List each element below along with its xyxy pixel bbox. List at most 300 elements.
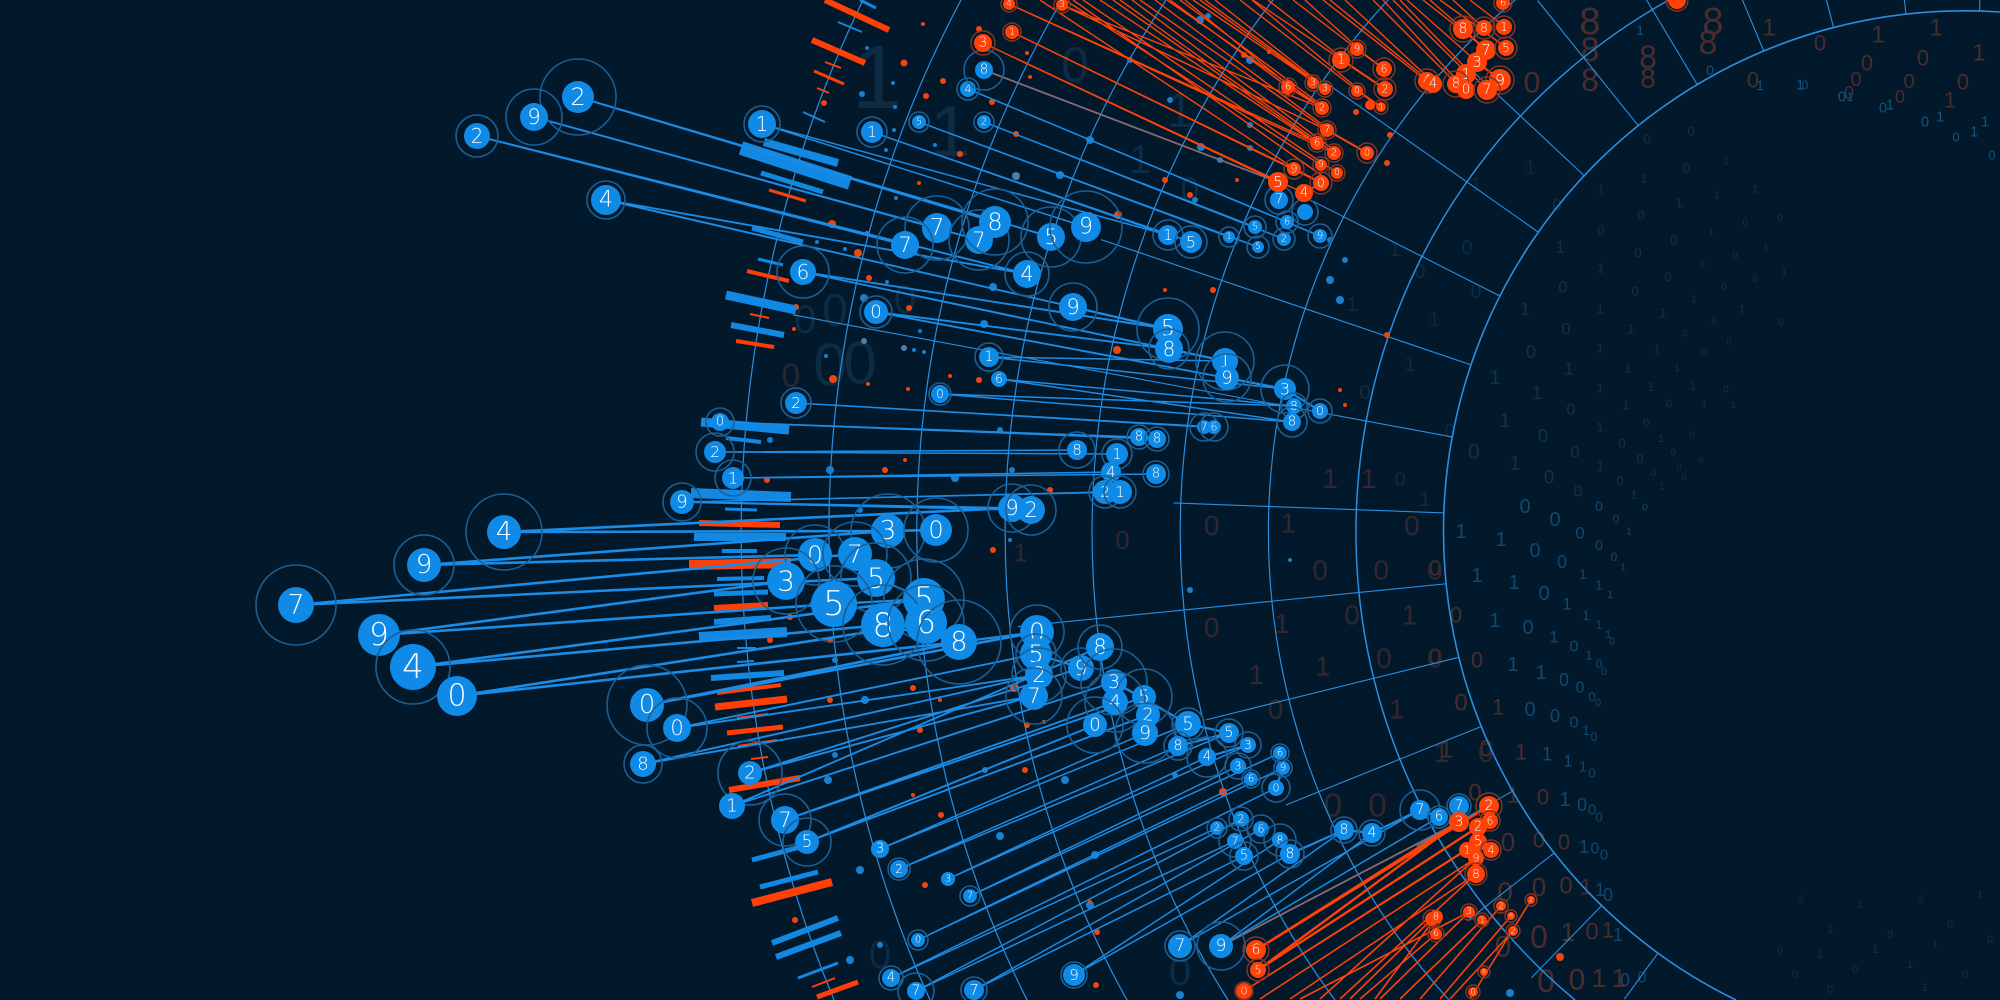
node cluster: upper blue: 5 xyxy=(1255,242,1261,252)
node cluster: lower orange xyxy=(1235,793,1537,1000)
blue digits upper right cluster: 0 xyxy=(1838,88,1846,106)
node cluster: upper orange: 3 xyxy=(1059,0,1065,10)
dark ghost digits behind left rings: 1 xyxy=(852,28,902,128)
node cluster: large left outliers: 4 xyxy=(496,517,512,547)
node cluster: lower orange: 2 xyxy=(1474,820,1482,834)
faint binary digits inside inner circle, upper: 0 xyxy=(1670,448,1676,458)
brown binary digits in outer rings: 1 xyxy=(1871,22,1885,48)
faint binary digits inside inner circle, upper: 0 xyxy=(1689,430,1695,440)
node cluster: upper orange: 8 xyxy=(1480,21,1488,35)
brown binary digits in outer rings: 1 xyxy=(1507,782,1519,808)
node cluster: upper orange: 1 xyxy=(1009,26,1015,38)
brown binary digits in outer rings: 8 xyxy=(1640,62,1656,94)
node cluster: central large: 5 xyxy=(914,581,934,617)
faint binary digits inside inner circle, upper: 0 xyxy=(1681,472,1687,482)
faint binary digits inside inner circle, upper: 1 xyxy=(1653,342,1661,358)
node cluster: upper blue: 6 xyxy=(1210,420,1218,434)
faint binary digits inside inner circle, upper: 0 xyxy=(1664,270,1672,284)
brown binary digits in outer rings xyxy=(1429,1,1986,999)
blue binary digits inside inner circle, lower: 0 xyxy=(1577,795,1587,815)
blue binary digits inside inner circle, lower: 0 xyxy=(1588,690,1596,704)
node cluster: lower blue: 9 xyxy=(1280,762,1286,774)
faint digits far lower right: 0 xyxy=(1962,969,1968,981)
blue binary digits inside inner circle, lower: 1 xyxy=(1596,618,1603,632)
brown binary digits in outer rings: 8 xyxy=(1581,31,1599,69)
node cluster: lower orange: 0 xyxy=(1470,988,1476,996)
node cluster: upper orange: 0 xyxy=(1354,86,1360,96)
node cluster: lower orange: 8 xyxy=(1433,912,1439,922)
dark ghost digits behind left rings: 0 xyxy=(1359,382,1371,404)
node cluster: upper blue: 1 xyxy=(1112,445,1122,463)
brown binary digits in outer rings: 0 xyxy=(1497,876,1513,908)
brown binary digits in outer rings: 8 xyxy=(1639,39,1657,75)
node cluster: lower blue: 0 xyxy=(1089,714,1101,736)
node cluster: central large: 2 xyxy=(1032,663,1046,687)
blue binary digits inside inner circle, lower: 0 xyxy=(1595,537,1603,553)
blue binary digits inside inner circle, lower: 1 xyxy=(1455,521,1467,543)
brown binary digits in outer rings: 1 xyxy=(1515,740,1527,764)
brown binary digits in outer rings: 0 xyxy=(1747,68,1759,92)
faint binary digits inside inner circle, upper: 0 xyxy=(1682,160,1690,176)
node cluster: lower blue: 9 xyxy=(1069,966,1079,984)
blue binary digits inside inner circle, lower: 0 xyxy=(1595,697,1601,709)
brown binary digits in outer rings: 0 xyxy=(1895,87,1905,107)
node cluster: lower orange: 2 xyxy=(1485,798,1493,814)
node cluster: upper blue: 8 xyxy=(1135,430,1143,444)
faint binary digits inside inner circle, upper: 0 xyxy=(1634,246,1642,260)
node cluster: upper orange xyxy=(971,0,1688,202)
blue digits upper right cluster: 0 xyxy=(1952,130,1960,144)
node cluster: upper orange: 7 xyxy=(1483,82,1491,98)
dim digits in middle rings: 1 xyxy=(1280,507,1296,538)
node cluster: large left outliers: 8 xyxy=(637,754,649,774)
dim digits in middle rings: 1 xyxy=(1249,659,1264,690)
node cluster: upper orange: 1 xyxy=(1378,102,1384,112)
faint binary digits inside inner circle, upper: 1 xyxy=(1596,458,1604,474)
node cluster: upper blue: 0 xyxy=(870,302,882,322)
node cluster: upper blue: 8 xyxy=(1153,432,1161,446)
faint binary digits inside inner circle, upper: 0 xyxy=(1618,436,1626,450)
node cluster: upper blue: 8 xyxy=(1163,337,1175,361)
faint binary digits inside inner circle, upper: 1 xyxy=(1627,322,1635,336)
node cluster: upper blue: 4 xyxy=(964,82,972,96)
faint digits far lower right: 1 xyxy=(1907,959,1913,971)
node cluster: lower blue: 3 xyxy=(945,874,951,884)
faint digits far lower right: 0 xyxy=(1987,934,1993,946)
blue binary digits inside inner circle, lower: 0 xyxy=(1609,636,1615,648)
node cluster: central large: 8 xyxy=(872,606,894,644)
blue binary digits inside inner circle, lower: 0 xyxy=(1642,502,1648,514)
blue binary digits inside inner circle, lower: 0 xyxy=(1591,840,1600,858)
node cluster: lower blue: 2 xyxy=(1142,704,1154,726)
dark ghost digits behind left rings: 0 xyxy=(1394,469,1406,491)
node cluster: upper orange: 0 xyxy=(1317,176,1325,190)
faint binary digits inside inner circle, upper: 1 xyxy=(1648,380,1655,394)
brown binary digits in outer rings: 1 xyxy=(1580,874,1592,900)
node cluster: upper orange: 6 xyxy=(1285,82,1291,92)
node cluster: central large: 9 xyxy=(1075,656,1087,680)
faint binary digits inside inner circle, upper: 1 xyxy=(1781,268,1787,278)
node cluster: lower orange: 6 xyxy=(1429,914,1435,924)
node cluster: lower blue: 6 xyxy=(1248,774,1254,784)
node cluster: upper orange: 2 xyxy=(1382,82,1388,96)
node cluster: lower blue: 5 xyxy=(1138,686,1150,708)
node cluster: upper blue: 1 xyxy=(1226,232,1232,242)
node cluster: large left outliers: 2 xyxy=(744,762,756,784)
node cluster: lower orange: 5 xyxy=(1474,834,1482,850)
faint binary digits inside inner circle, upper: 1 xyxy=(1509,453,1521,475)
scattered data dots, orange xyxy=(764,22,1564,988)
blue binary digits inside inner circle, lower: 0 xyxy=(1524,699,1536,721)
faint digits far lower right: 0 xyxy=(1852,964,1858,976)
node cluster: upper orange: 1 xyxy=(1500,20,1508,34)
blue binary digits inside inner circle, lower: 0 xyxy=(1588,802,1596,818)
node cluster: lower blue: 7 xyxy=(969,981,979,999)
node cluster: upper orange: 5 xyxy=(1502,41,1510,55)
node cluster: upper blue: 1 xyxy=(756,112,768,136)
dim digits in middle rings: 0 xyxy=(1204,612,1220,643)
faint binary digits inside inner circle, upper: 0 xyxy=(1650,467,1656,479)
faint binary digits inside inner circle, upper: 1 xyxy=(1739,304,1745,316)
blue binary digits inside inner circle, lower: 1 xyxy=(1507,654,1519,676)
faint binary digits inside inner circle, upper: 1 xyxy=(1597,182,1605,198)
brown binary digits in outer rings: 0 xyxy=(1558,830,1570,854)
node cluster: lower blue: 8 xyxy=(1340,822,1348,838)
node cluster: lower orange: 5 xyxy=(1254,964,1262,976)
node cluster: upper blue: 2 xyxy=(791,394,801,412)
faint digits far lower right: 0 xyxy=(1777,944,1783,956)
blue binary digits inside inner circle, lower: 0 xyxy=(1529,540,1541,562)
brown binary digits in outer rings: 0 xyxy=(1429,556,1441,580)
node cluster: upper orange: 4 xyxy=(1429,76,1437,92)
blue digits upper right cluster: 0 xyxy=(1879,100,1887,116)
faint digits far lower right: 1 xyxy=(1827,924,1833,936)
blue binary digits inside inner circle, lower: 0 xyxy=(1603,885,1613,905)
node cluster: lower blue: 3 xyxy=(1234,760,1242,772)
node cluster: upper orange: 2 xyxy=(1331,148,1337,158)
faint binary digits inside inner circle, upper: 0 xyxy=(1558,278,1568,296)
dim digits in middle rings: 0 xyxy=(1404,510,1420,541)
brown binary digits in outer rings: 1 xyxy=(1492,694,1504,720)
node cluster: lower blue: 3 xyxy=(876,842,884,856)
node cluster: lower orange: 8 xyxy=(1472,867,1480,881)
node cluster: upper blue: 9 xyxy=(1317,230,1323,242)
blue binary digits inside inner circle, lower: 0 xyxy=(1613,512,1620,526)
faint binary digits inside inner circle, upper: 0 xyxy=(1676,462,1682,472)
blue binary digits inside inner circle, lower: 0 xyxy=(1588,766,1596,780)
scattered data dots, blue xyxy=(767,13,1514,999)
node cluster: lower orange: 8 xyxy=(1482,968,1486,976)
radial bars on outer ring, blue xyxy=(691,0,876,978)
dim digits in middle rings: 1 xyxy=(1274,608,1290,639)
node cluster: upper blue: 4 xyxy=(1106,463,1116,481)
node cluster: upper blue: 6 xyxy=(995,372,1003,386)
dark ghost digits behind left rings: 0 xyxy=(1444,421,1456,443)
node cluster: upper blue: 8 xyxy=(1152,466,1160,482)
blue digits upper right cluster: 0 xyxy=(1921,114,1929,130)
node cluster: lower orange: 6 xyxy=(1486,814,1494,828)
brown binary digits in outer rings: 1 xyxy=(1944,88,1956,112)
node cluster: upper orange: 3 xyxy=(1310,78,1316,88)
faint binary digits inside inner circle, upper: 0 xyxy=(1468,440,1480,464)
node cluster: lower orange: 8 xyxy=(1509,912,1513,920)
blue binary digits inside inner circle, lower: 1 xyxy=(1579,566,1587,582)
node cluster: lower orange: 9 xyxy=(1472,852,1480,864)
node cluster: central large: 3 xyxy=(880,516,896,546)
node cluster: large left outliers: 0 xyxy=(670,716,684,740)
faint binary digits inside inner circle, upper: 1 xyxy=(1624,360,1632,376)
node cluster: large left outliers: 0 xyxy=(447,678,467,714)
node cluster: upper orange: 9 xyxy=(1354,44,1360,54)
node cluster: lower blue: 7 xyxy=(1232,834,1238,848)
faint binary digits inside inner circle, upper: 1 xyxy=(1520,299,1530,319)
brown binary digits in outer rings: 1 xyxy=(1602,918,1614,942)
connecting lines, orange xyxy=(983,0,1531,999)
faint digits far lower right: 1 xyxy=(1872,944,1878,956)
blue binary digits inside inner circle, lower xyxy=(1455,496,1648,990)
faint digits far lower right: 1 xyxy=(1817,949,1823,961)
dim digits in middle rings: 0 xyxy=(1268,694,1283,725)
node cluster: lower blue: 8 xyxy=(1174,738,1182,754)
brown binary digits in outer rings: 0 xyxy=(1532,872,1546,902)
faint binary digits inside inner circle, upper: 1 xyxy=(1596,340,1604,356)
node cluster: upper blue: 5 xyxy=(1161,316,1175,342)
node cluster: lower orange: 3 xyxy=(1455,814,1463,830)
node cluster: upper blue: 5 xyxy=(1252,222,1258,232)
node cluster: upper blue: 8 xyxy=(1072,441,1082,459)
faint binary digits inside inner circle, upper: 0 xyxy=(1682,328,1688,340)
dim digits in middle rings: 1 xyxy=(1013,540,1027,568)
blue binary digits inside inner circle, lower: 0 xyxy=(1570,638,1579,656)
blue binary digits inside inner circle, lower: 0 xyxy=(1557,552,1567,572)
brown binary digits in outer rings: 1 xyxy=(1972,40,1986,66)
node cluster: lower orange: 2 xyxy=(1510,926,1516,936)
blue binary digits inside inner circle, lower: 0 xyxy=(1576,680,1585,696)
dim digits in middle rings: 0 xyxy=(1376,643,1392,674)
dark ghost digits behind left rings: 0 xyxy=(822,284,848,336)
node cluster: lower blue: 7 xyxy=(1416,802,1424,818)
node cluster: lower blue: 9 xyxy=(1216,936,1226,956)
dim digits in middle rings: 1 xyxy=(1361,463,1376,494)
faint binary digits inside inner circle, upper: 1 xyxy=(1596,302,1604,316)
node cluster: upper blue: 4 xyxy=(599,188,613,212)
node cluster: lower blue: 5 xyxy=(1240,848,1248,864)
node cluster: upper blue: 2 xyxy=(1100,483,1110,501)
node cluster: central large xyxy=(753,484,1122,724)
blue binary digits inside inner circle, lower: 0 xyxy=(1620,970,1630,990)
dark ghost digits behind left rings: 1 xyxy=(1404,354,1416,376)
brown binary digits in outer rings: 0 xyxy=(1479,736,1493,762)
faint binary digits inside inner circle, upper: 0 xyxy=(1570,442,1580,462)
faint binary digits inside inner circle, upper: 0 xyxy=(1552,196,1562,214)
node cluster: lower blue: 4 xyxy=(1109,691,1121,713)
faint binary digits inside inner circle, upper: 0 xyxy=(1742,218,1748,228)
dark ghost digits behind left rings: 1 xyxy=(1428,309,1440,331)
blue digits upper right cluster: 0 xyxy=(1802,78,1809,92)
blue digits upper right cluster: 1 xyxy=(1796,76,1804,94)
node cluster: central large: 9 xyxy=(1005,496,1019,520)
blue binary digits inside inner circle, lower: 1 xyxy=(1559,789,1571,811)
node cluster: central large: 5 xyxy=(823,584,845,624)
blue binary digits inside inner circle, lower: 1 xyxy=(1595,880,1605,900)
brown binary digits in outer rings: 0 xyxy=(1559,872,1573,900)
dim digits in middle rings: 0 xyxy=(1204,510,1220,541)
faint binary digits inside inner circle, upper: 1 xyxy=(1752,184,1758,196)
blue binary digits inside inner circle, lower: 1 xyxy=(1582,607,1590,623)
brown binary digits in outer rings: 8 xyxy=(1581,62,1599,98)
node cluster: upper orange: 6 xyxy=(1314,138,1320,148)
faint binary digits inside inner circle, upper: 0 xyxy=(1699,260,1705,270)
node cluster: lower blue: 4 xyxy=(1203,750,1211,764)
brown binary digits in outer rings: 0 xyxy=(1533,828,1545,852)
node cluster: central large: 7 xyxy=(847,540,863,568)
node cluster: upper orange: 3 xyxy=(979,36,987,50)
node cluster: upper blue: 1 xyxy=(1115,483,1125,501)
faint binary digits inside inner circle, upper: 0 xyxy=(1538,426,1548,446)
node cluster: lower blue: 8 xyxy=(1286,846,1294,862)
node cluster: central large: 2 xyxy=(1024,498,1038,522)
faint binary digits inside inner circle, upper: 0 xyxy=(1597,222,1605,238)
brown binary digits in outer rings: 0 xyxy=(1530,919,1548,955)
connecting lines, muted grey-orange xyxy=(984,70,1459,946)
faint binary digits inside inner circle, upper: 1 xyxy=(1659,482,1665,492)
node cluster: large left outliers: 9 xyxy=(369,617,389,653)
node cluster: lower blue: 0 xyxy=(1272,782,1280,794)
faint digits far lower right: 0 xyxy=(1917,894,1923,906)
faint digits far lower right: 0 xyxy=(1887,929,1893,941)
brown binary digits in outer rings: 0 xyxy=(1495,930,1511,964)
concentric ring grid xyxy=(741,0,2000,1000)
blue binary digits inside inner circle, lower: 0 xyxy=(1611,550,1618,564)
dark ghost digits behind left rings: 1 xyxy=(1389,239,1401,261)
faint binary digits inside inner circle, upper: 1 xyxy=(1555,238,1565,256)
node cluster: upper orange: 8 xyxy=(1459,21,1467,37)
blue binary digits inside inner circle, lower: 1 xyxy=(1508,572,1520,594)
node cluster: upper orange: 3 xyxy=(1322,84,1328,94)
brown binary digits in outer rings: 1 xyxy=(1561,917,1575,947)
faint binary digits inside inner circle, upper: 0 xyxy=(1666,398,1672,410)
faint binary digits inside inner circle, upper: 0 xyxy=(1752,274,1758,286)
node cluster: lower blue: 6 xyxy=(1277,748,1283,758)
node cluster: upper blue: 2 xyxy=(1281,234,1287,244)
dim digits in middle rings: 1 xyxy=(1389,694,1404,725)
dim digits in middle rings: 1 xyxy=(1402,599,1417,630)
faint binary digits inside inner circle, upper: 1 xyxy=(1532,383,1542,403)
blue binary digits inside inner circle, lower: 1 xyxy=(1471,565,1483,587)
dim digits in middle rings: 1 xyxy=(1434,737,1449,768)
brown binary digits in outer rings: 0 xyxy=(1844,83,1854,103)
brown binary digits in outer rings: 1 xyxy=(1592,963,1606,993)
node cluster: upper orange: 7 xyxy=(1324,124,1330,136)
node cluster: upper blue: 7 xyxy=(930,215,944,241)
node cluster: lower blue: 7 xyxy=(1455,798,1463,814)
brown binary digits in outer rings: 0 xyxy=(1585,918,1599,946)
faint binary digits inside inner circle, upper: 1 xyxy=(1691,294,1697,306)
node cluster: lower orange: 3 xyxy=(1466,907,1472,917)
node cluster: upper blue: 8 xyxy=(1288,414,1296,430)
blue digits upper right cluster xyxy=(1636,22,1996,162)
blue binary digits inside inner circle, lower: 0 xyxy=(1600,846,1608,864)
node cluster: lower blue: 6 xyxy=(1258,822,1264,836)
faint binary digits inside inner circle, upper: 0 xyxy=(1631,284,1639,298)
dim digits in middle rings: 0 xyxy=(1427,555,1443,586)
node cluster: upper blue: 5 xyxy=(1044,225,1058,249)
node cluster: upper orange: 1 xyxy=(1337,52,1345,68)
brown binary digits in outer rings: 1 xyxy=(1439,736,1453,764)
node cluster: lower orange: 2 xyxy=(1498,902,1504,910)
blue binary digits inside inner circle, lower: 0 xyxy=(1596,657,1603,671)
blue binary digits inside inner circle, lower: 1 xyxy=(1579,837,1589,857)
node cluster: upper blue: 9 xyxy=(527,105,541,129)
node cluster: lower blue: 0 xyxy=(915,934,921,946)
blue binary digits inside inner circle, lower: 1 xyxy=(1489,610,1501,632)
faint binary digits inside inner circle, upper: 0 xyxy=(1732,250,1738,262)
faint binary digits inside inner circle, upper: 0 xyxy=(1544,468,1554,488)
faint binary digits inside inner circle, upper: 0 xyxy=(1561,320,1571,338)
brown binary digits in outer rings: 8 xyxy=(1579,1,1601,43)
blue binary digits inside inner circle, lower: 1 xyxy=(1562,594,1572,614)
dark ghost digits behind left rings: 0 xyxy=(869,933,891,977)
dark ghost digits behind left rings: 0 xyxy=(843,330,877,396)
blue binary digits inside inner circle, lower: 0 xyxy=(1591,730,1598,744)
blue binary digits inside inner circle, lower: 1 xyxy=(1535,662,1547,684)
faint binary digits inside inner circle, upper: 0 xyxy=(1723,384,1729,396)
dim digits in middle rings: 0 xyxy=(1312,555,1328,586)
blue binary digits inside inner circle, lower: 1 xyxy=(1582,722,1590,738)
node cluster: upper blue: 2 xyxy=(981,116,987,128)
blue digits upper right cluster: 1 xyxy=(1886,96,1894,114)
node cluster: large left outliers: 0 xyxy=(639,690,655,720)
node cluster: upper blue: 8 xyxy=(1290,399,1298,413)
node cluster: large left outliers: 1 xyxy=(728,468,738,488)
node cluster: lower orange: 0 xyxy=(1240,984,1248,998)
faint binary digits inside inner circle, upper: 1 xyxy=(1701,400,1707,410)
node cluster: upper orange: 4 xyxy=(1423,74,1431,88)
node cluster: upper blue: 9 xyxy=(1079,214,1093,240)
dark ghost digits behind left rings: 0 xyxy=(794,298,816,342)
node cluster: lower blue: 2 xyxy=(1238,812,1244,826)
blue binary digits inside inner circle, lower: 0 xyxy=(1559,670,1569,690)
node cluster: central large: 5 xyxy=(1028,640,1044,668)
faint binary digits inside inner circle, upper: 1 xyxy=(1597,260,1605,276)
dim digits in middle rings: 0 xyxy=(1324,788,1342,825)
dark ghost digits behind left rings: 0 xyxy=(1414,261,1426,283)
node cluster: lower blue: 7 xyxy=(778,808,792,832)
faint binary digits inside inner circle, upper: 0 xyxy=(1778,318,1784,328)
connecting lines, blue xyxy=(296,89,1439,991)
faint digits far lower right: 1 xyxy=(1857,899,1863,911)
brown binary digits in outer rings: 1 xyxy=(1762,14,1776,42)
node cluster: lower blue: 8 xyxy=(1276,834,1284,846)
faint binary digits inside inner circle, upper: 1 xyxy=(1631,488,1638,502)
node cluster: lower blue: 5 xyxy=(1225,725,1233,741)
dark ghost digits behind left rings: 0 xyxy=(813,332,847,398)
faint binary digits inside inner circle, upper: 0 xyxy=(1567,402,1576,418)
faint binary digits inside inner circle, upper: 1 xyxy=(1690,382,1696,392)
faint binary digits inside inner circle, upper: 0 xyxy=(1698,455,1704,465)
faint binary digits inside inner circle, upper: 0 xyxy=(1726,336,1732,348)
node cluster: lower blue: 7 xyxy=(967,890,973,902)
node cluster: central large: 3 xyxy=(777,564,795,598)
node cluster: upper blue: 2 xyxy=(570,83,586,111)
node cluster: large left outliers: 9 xyxy=(416,550,432,580)
node cluster: upper blue: 3 xyxy=(1280,380,1290,398)
node cluster: upper blue: 8 xyxy=(980,62,988,78)
node cluster: lower blue: 7 xyxy=(912,983,920,999)
node cluster: lower orange: 6 xyxy=(1433,929,1439,939)
blue binary digits inside inner circle, lower: 0 xyxy=(1575,524,1585,542)
faint binary digits inside inner circle, upper: 0 xyxy=(1637,452,1644,466)
